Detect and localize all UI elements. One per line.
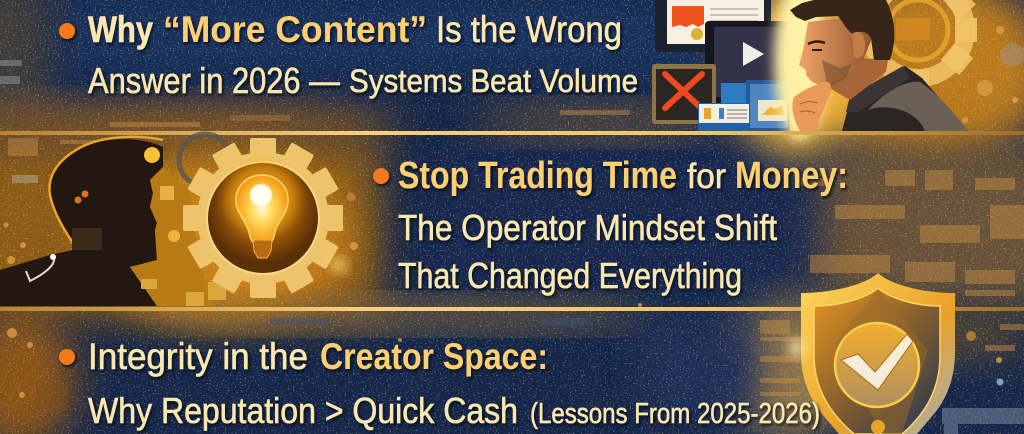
text block: stop trading time [373, 155, 848, 296]
collar [846, 66, 910, 112]
icon: back monitor [655, 0, 771, 52]
person thinking [774, 0, 968, 140]
text block: integrity: Integrity in the [88, 336, 308, 377]
text block: integrity [59, 336, 820, 431]
icon: content documents [698, 80, 790, 131]
panel: middle scene [0, 134, 343, 306]
text block: stop trading time: Money: [735, 155, 848, 197]
divider: lower gold bar [0, 307, 1024, 311]
icon: video player [705, 21, 788, 103]
text block: integrity: (Lessons From 2025-2026) [530, 398, 820, 430]
torso [842, 66, 968, 131]
text block: why more content: Answer in 2026 — [88, 60, 340, 101]
icon: rejected content card [652, 64, 716, 124]
icon: check badge [835, 323, 919, 407]
text block: why more content [59, 9, 638, 101]
panel: top scene [652, 0, 977, 140]
text block: integrity: Why Reputation > Quick Cash [88, 390, 518, 431]
bullet [59, 23, 75, 39]
text block: integrity: Creator Space: [320, 336, 548, 377]
text block: stop trading time: The Operator Mindset Shift [398, 207, 777, 248]
glints [332, 43, 1024, 386]
text block: stop trading time: That Changed Everything [398, 255, 742, 296]
silhouette head [0, 137, 226, 306]
icon: lightbulb [226, 162, 298, 258]
face [799, 16, 872, 87]
background dark gear ring [179, 134, 231, 186]
panel: shield [801, 273, 955, 434]
bullet [373, 168, 389, 184]
hand [792, 82, 831, 131]
bullet [59, 349, 75, 365]
shawl [868, 82, 968, 131]
neck [826, 58, 888, 100]
text block: why more content: Why [88, 9, 153, 50]
text block: why more content: “More Content” [163, 9, 427, 50]
hair [790, 0, 894, 60]
ear [852, 32, 865, 58]
text block: why more content: Is the Wrong [436, 9, 622, 50]
text block: stop trading time: Stop Trading Time [398, 155, 677, 197]
divider: upper gold bar [0, 131, 1024, 135]
icon: gear behind person [870, 0, 977, 84]
text block: stop trading time: for [687, 157, 726, 196]
icon: gear with lightbulb [183, 138, 343, 298]
text block: why more content: Systems Beat Volume [349, 63, 638, 99]
gold profile fill [130, 167, 215, 306]
